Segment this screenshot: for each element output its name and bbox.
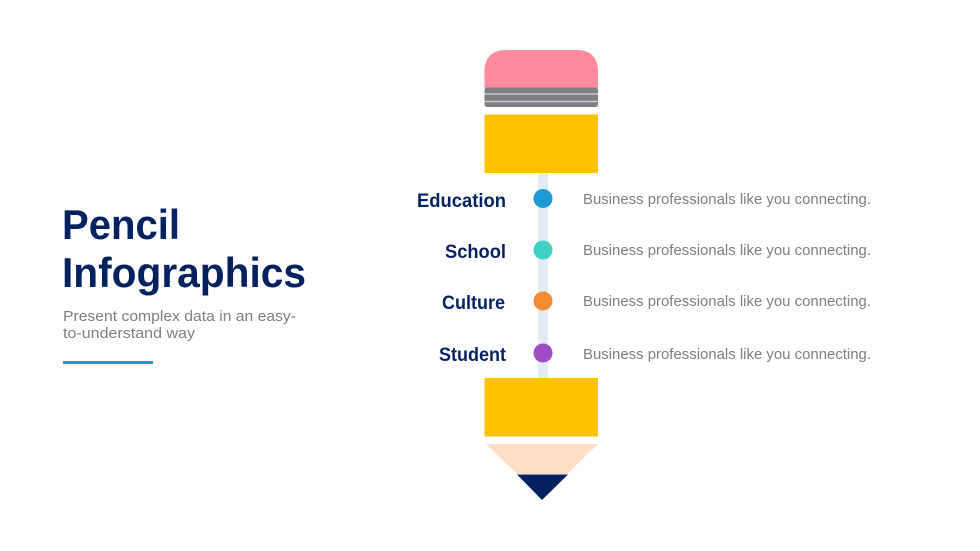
item: Student: Business professionals like you connecting. [583,346,871,363]
item: School: Business professionals like you connecting. [583,242,871,259]
item: School [445,240,871,263]
accent underline [63,361,153,364]
item: Education: Business professionals like you connecting. [583,191,871,208]
item: Culture [442,292,871,314]
pencil upper body [484,114,598,173]
item: Education [417,189,871,212]
pencil eraser [484,50,598,88]
pencil ferrule [484,88,598,107]
subtitle: to-understand way [63,325,196,342]
item: Culture: Culture [442,293,505,314]
pencil stem [538,173,548,378]
title: Pencil [62,201,180,248]
pencil wood tip [486,444,598,474]
pencil lower body [484,378,598,436]
item: Culture: Business professionals like you connecting. [583,293,871,310]
subtitle [63,308,296,342]
title: Infographics [62,249,306,296]
item: Student [439,344,871,366]
pencil lead [517,474,568,500]
subtitle: Present complex data in an easy- [63,308,296,325]
item: School: School [445,242,506,263]
item: Education: Education [417,191,506,212]
title [62,201,306,296]
item: Student: Student [439,345,507,366]
